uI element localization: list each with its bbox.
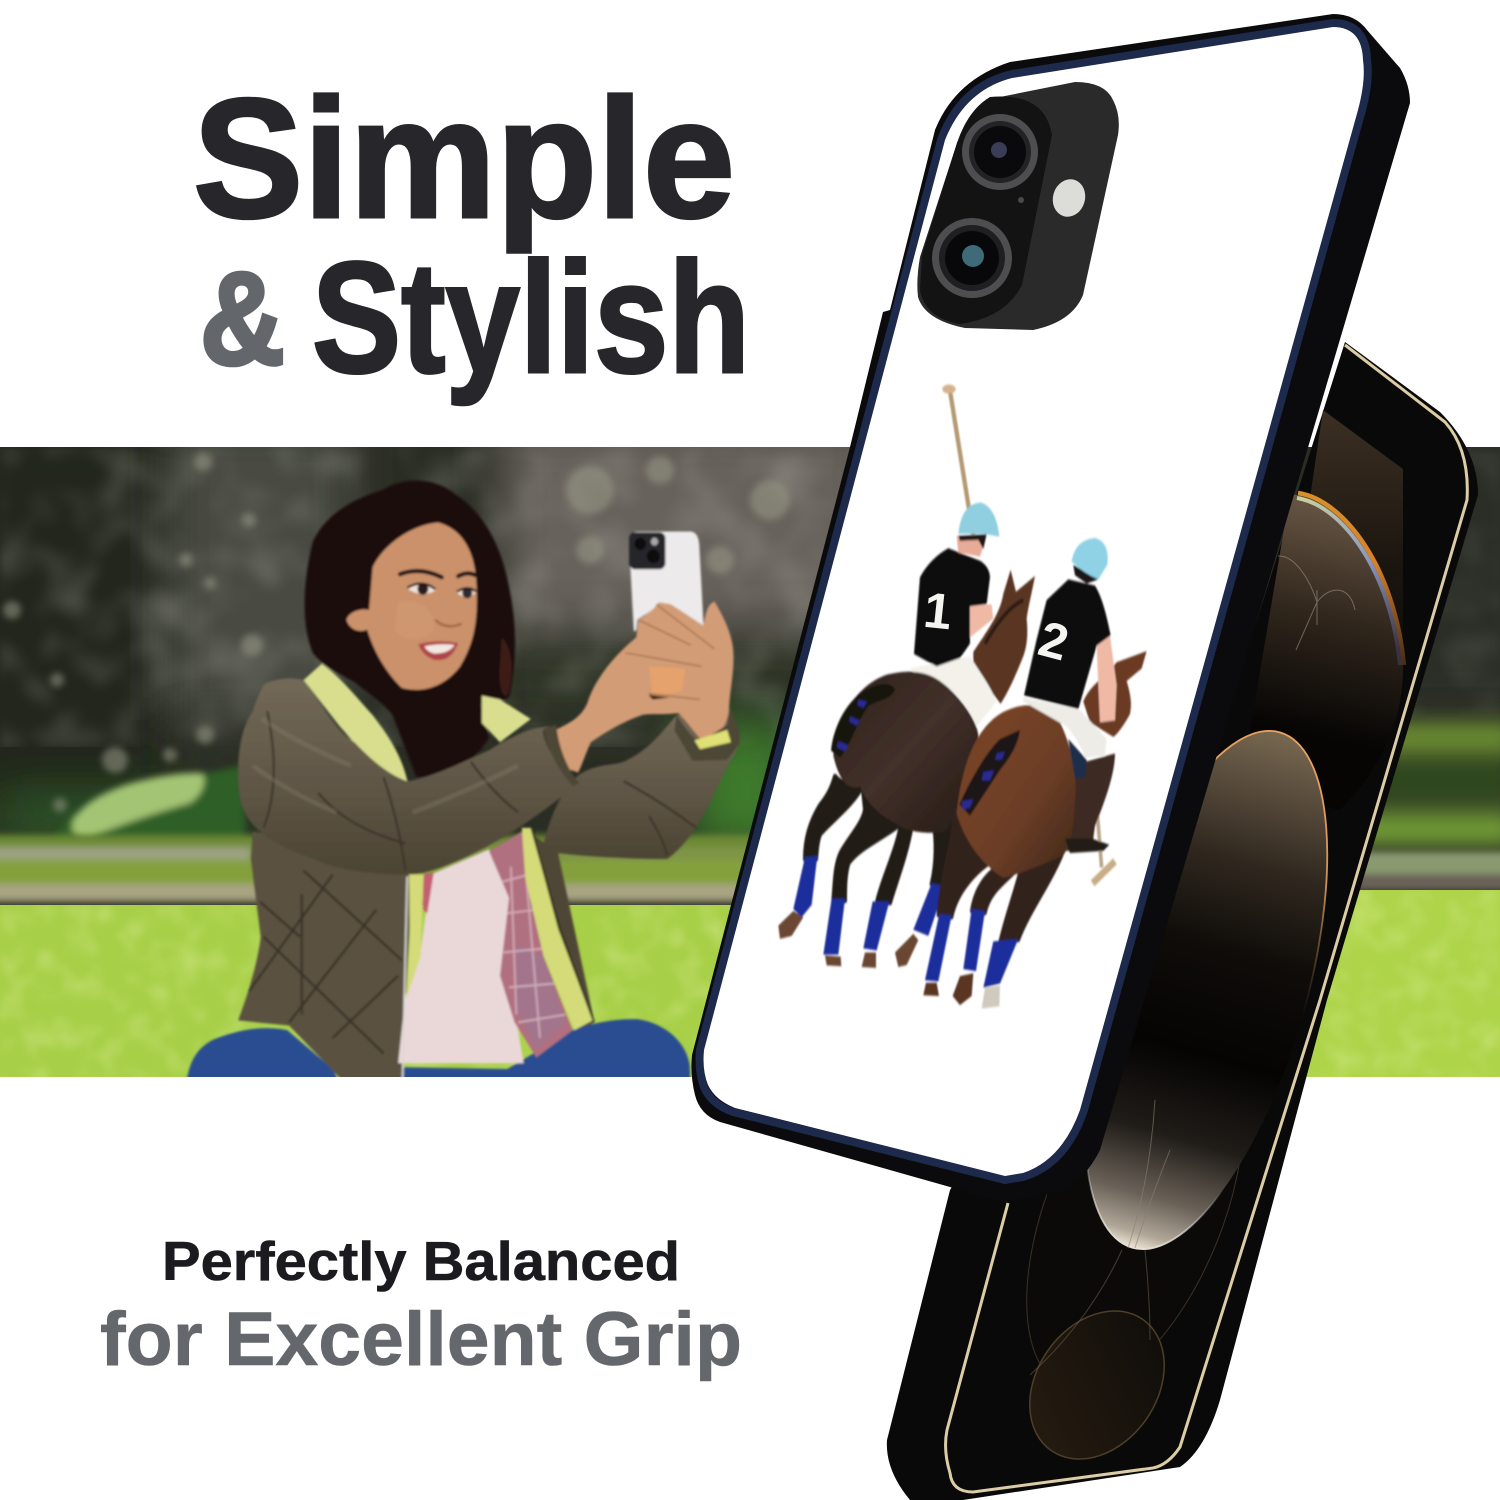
horse 2 legs xyxy=(938,809,1065,942)
wallpaper star rays xyxy=(1278,556,1355,650)
arm sleeve xyxy=(238,678,578,875)
small phone in hand xyxy=(629,531,704,700)
quilting lines xyxy=(249,871,402,1054)
hands xyxy=(555,601,734,773)
rider 1 trousers xyxy=(910,656,997,727)
jersey number 2: 2 xyxy=(1033,610,1074,672)
front phone case xyxy=(691,14,1410,1202)
bokeh lights xyxy=(3,453,790,812)
smile xyxy=(418,641,458,660)
ampersand: & xyxy=(200,245,285,392)
title word: Stylish: Stylish xyxy=(312,230,750,406)
horse 1 tail xyxy=(831,684,895,758)
lens housing xyxy=(920,96,1052,324)
face xyxy=(347,523,477,690)
horse 1 head xyxy=(973,570,1035,704)
horse 2 head xyxy=(1083,651,1147,737)
horse 1 legs xyxy=(805,776,970,903)
navy rim xyxy=(700,23,1368,1180)
jersey number 1: 1 xyxy=(921,582,955,640)
caption line 1: Perfectly Balanced xyxy=(162,1230,680,1292)
horse 2 neck xyxy=(1063,754,1115,851)
right sleeve xyxy=(544,711,740,859)
photo band: park background xyxy=(0,420,1500,1092)
hair highlight xyxy=(499,637,512,696)
plaid overshirt xyxy=(489,832,573,1057)
horse 1 hooves xyxy=(778,911,918,968)
white back panel xyxy=(704,27,1364,1176)
eyes xyxy=(407,585,476,597)
eyebrows xyxy=(400,571,475,577)
mottled foliage xyxy=(0,447,860,747)
neck xyxy=(387,672,435,723)
jeans xyxy=(185,1019,691,1092)
horse 1 bandages xyxy=(793,856,945,955)
jacket lining xyxy=(406,828,593,1030)
flash xyxy=(1048,175,1090,221)
horse 2 body xyxy=(957,705,1076,878)
wallpaper: upper lobe xyxy=(1240,494,1403,810)
jacket back panel and zipper side xyxy=(534,836,596,1029)
nose xyxy=(435,620,462,626)
rainbow arc xyxy=(1297,493,1404,665)
caption: Perfectly Balanced for Excellent Grip xyxy=(100,1230,742,1382)
wallpaper: main lobe xyxy=(1036,705,1376,1275)
title word: Simple: Simple xyxy=(193,64,735,254)
upper lens xyxy=(962,114,1038,190)
camera module xyxy=(917,82,1119,330)
rider 1 jersey xyxy=(914,548,990,666)
rider 2 boot xyxy=(1065,838,1109,853)
cuffs xyxy=(674,708,740,761)
rider 1 arm xyxy=(970,604,993,637)
rider 2 trousers xyxy=(1023,698,1107,758)
rider 2 helmet xyxy=(1073,565,1098,584)
lawn and path strips xyxy=(0,835,760,905)
shirt xyxy=(398,849,524,1063)
wallpaper: lower lobes xyxy=(982,1001,1288,1485)
wallpaper panel below notch xyxy=(1280,410,1403,700)
jacket body xyxy=(238,832,413,1080)
title: Simple & Stylish xyxy=(193,64,750,406)
green sunlit bush xyxy=(55,765,245,840)
caption line 2: for Excellent Grip xyxy=(100,1297,742,1382)
horse 1 body xyxy=(833,672,978,833)
collar xyxy=(304,664,531,785)
horse 2 bandages xyxy=(925,909,1018,988)
rider 1 neck xyxy=(957,536,987,557)
woman taking a selfie xyxy=(185,481,740,1092)
lower lens xyxy=(932,218,1012,298)
back phone with gold frame xyxy=(887,342,1478,1500)
rider 2 jersey xyxy=(1024,579,1111,709)
mallet raised xyxy=(942,385,973,536)
sleeve quilting and highlights xyxy=(264,711,696,871)
horse 2 hooves xyxy=(923,973,1000,1008)
hair xyxy=(305,481,515,777)
microphone dot xyxy=(1018,197,1024,203)
rider 2 arm xyxy=(1097,635,1117,722)
gold frame line xyxy=(946,345,1467,1492)
horse 2 tail xyxy=(959,730,1020,816)
mallet lowered xyxy=(1093,797,1115,883)
polo illustration xyxy=(778,385,1147,1008)
rider 1 helmet xyxy=(958,503,999,537)
